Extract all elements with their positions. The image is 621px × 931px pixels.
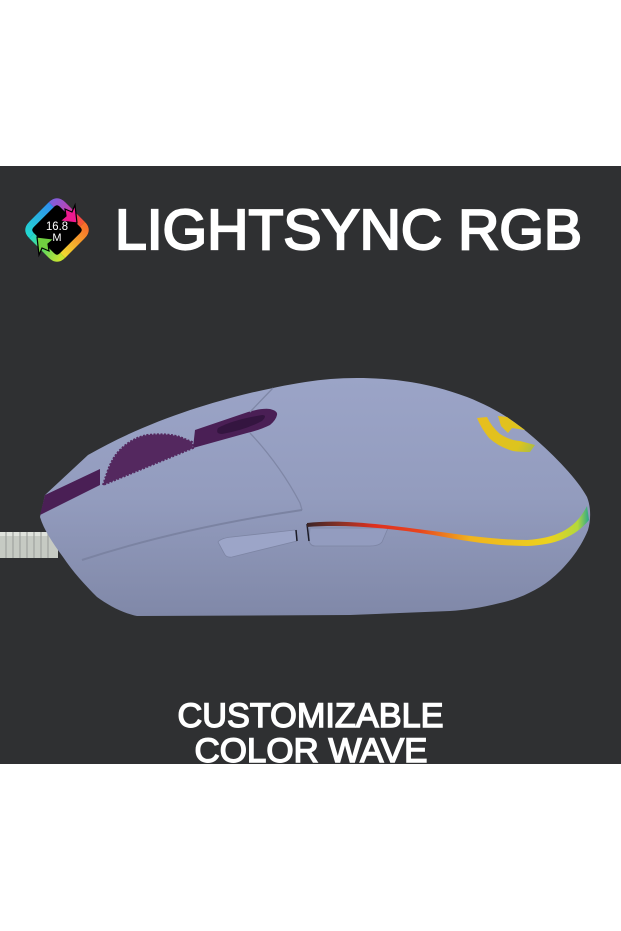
side button left: [218, 530, 297, 557]
logo: G mark: [477, 416, 535, 452]
side button right: [309, 528, 388, 546]
caption: customizable color wave: [178, 697, 444, 770]
heading: LIGHTSYNC RGB: LIGHTSYNC RGB: [115, 198, 582, 262]
caption: customizable color wave: CUSTOMIZABLE: [178, 697, 444, 735]
RGB light strip: [307, 506, 589, 546]
seam lines: [250, 388, 302, 510]
purple channel right with DPI recess: [193, 409, 277, 448]
cable: [0, 532, 58, 558]
mouse body: [40, 378, 590, 616]
caption: customizable color wave: COLOR WAVE: [194, 732, 428, 770]
illustration: mouse: [0, 378, 590, 616]
purple channel left: [40, 469, 100, 515]
scroll wheel: [103, 434, 193, 485]
icon: 16.8M RGB badge: M: [52, 232, 62, 244]
icon: 16.8M RGB badge: [24, 197, 90, 263]
panel: dark background: [0, 166, 621, 764]
icon: 16.8M RGB badge: 16.8: [46, 221, 68, 233]
DPI button: [217, 415, 265, 434]
